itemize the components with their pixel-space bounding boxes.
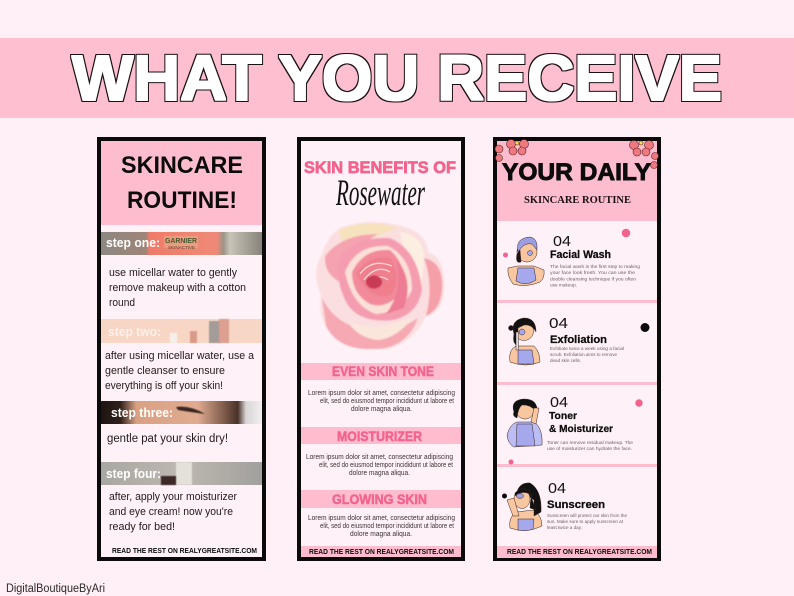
benefit: even skin tone: elit, sed do eiusmod tempor incididunt ut labore et (320, 398, 454, 405)
step: sunscreen: 04 (548, 480, 566, 497)
panel 3 footer: READ THE REST ON REALYGREATSITE.COM (507, 547, 652, 556)
benefit: moisturizer (301, 427, 461, 477)
benefit: even skin tone: EVEN SKIN TONE (332, 364, 434, 379)
panel 3 header: YOUR DAILY (502, 159, 651, 186)
step: exfoliation: Exfoliation (550, 334, 607, 346)
step: facial wash: double cleansing technique if you often (550, 276, 636, 282)
step: exfoliation: 04 (549, 315, 568, 332)
step: toner and moisturizer: Toner can remove residual makeup. The (547, 440, 633, 446)
step one banner: step one: (106, 236, 160, 250)
panel 3 header (495, 140, 658, 221)
illustration: rose (316, 222, 444, 349)
step: sunscreen: Sunscreen (547, 499, 605, 511)
title: WHAT YOU RECEIVE (72, 42, 722, 114)
step: facial wash: The facial wash is the first step to making (550, 264, 640, 270)
step three banner (101, 401, 262, 424)
step one text: remove makeup with a cotton (109, 282, 246, 294)
benefit: glowing skin: GLOWING SKIN (332, 492, 427, 507)
decorative dots (502, 229, 650, 498)
benefit: even skin tone (301, 363, 461, 413)
panel: daily skincare routine (495, 139, 659, 559)
benefit: glowing skin: elit, sed do eiusmod tempor incididunt ut labore et (320, 523, 454, 530)
benefit: even skin tone: Lorem ipsum dolor sit amet, consectetur adipiscing (308, 390, 455, 397)
benefit: glowing skin (301, 490, 461, 538)
step four banner: step four: (106, 467, 161, 481)
step: toner and moisturizer: 04 (550, 394, 568, 411)
step: facial wash: 04 (553, 233, 571, 250)
step two text: gentle cleanser to ensure (105, 365, 225, 377)
step: toner and moisturizer: use of moisturizer can hydrate the face. (547, 446, 632, 452)
icon: woman with cotton pad (507, 399, 542, 447)
icon: corner flowers (495, 140, 658, 168)
benefit: moisturizer: dolore magna aliqua. (349, 470, 410, 477)
panel 3 header: SKINCARE ROUTINE (524, 195, 631, 206)
step: facial wash: Facial Wash (550, 249, 611, 261)
step: sunscreen: Sunscreen will protect our skin from the (547, 513, 627, 519)
step three text: gentle pat your skin dry! (107, 433, 228, 445)
step: sunscreen (507, 480, 627, 531)
panel 1 header: SKINCARE (121, 152, 243, 179)
panel: rosewater benefits (299, 139, 463, 559)
step two text: everything is off your skin! (105, 380, 223, 392)
benefit: glowing skin: Lorem ipsum dolor sit amet, consectetur adipiscing (308, 515, 455, 522)
step: toner and moisturizer: & Moisturizer (549, 423, 613, 435)
script heading: Rosewater (335, 173, 425, 214)
shop credit: DigitalBoutiqueByAri (6, 583, 105, 595)
step: sunscreen: least twice a day. (547, 525, 582, 531)
step: exfoliation (508, 315, 624, 365)
benefit: moisturizer: elit, sed do eiusmod tempor incididunt ut labore et (319, 462, 453, 469)
step four text: and eye cream! now you're (109, 506, 233, 518)
step: exfoliation: scrub. Exfoliation aims to remove (550, 352, 617, 358)
step two text (105, 350, 255, 392)
benefit: moisturizer: MOISTURIZER (337, 429, 422, 444)
step four text: ready for bed! (109, 521, 175, 533)
icon: woman applying sunscreen (507, 483, 542, 531)
panel 1 header (101, 141, 262, 225)
step three banner: step three: (111, 406, 173, 420)
step: facial wash: your face look fresh. You can use the (550, 270, 635, 276)
step: facial wash (508, 233, 640, 288)
panel: skincare routine (99, 139, 264, 559)
step one banner (101, 232, 262, 255)
step: facial wash: use makeup. (550, 282, 577, 288)
title banner (0, 38, 794, 118)
step one text (109, 267, 246, 309)
panel 1 header: ROUTINE! (127, 187, 237, 214)
dividers (497, 300, 657, 467)
panel 3 footer (497, 546, 657, 558)
panel 1 footer: READ THE REST ON REALYGREATSITE.COM (112, 546, 257, 555)
step four text: after, apply your moisturizer (109, 491, 237, 503)
step: toner and moisturizer (507, 394, 633, 452)
benefit: glowing skin: dolore magna aliqua. (350, 531, 412, 538)
benefit: moisturizer: Lorem ipsum dolor sit amet, consectetur adipiscing (306, 454, 453, 461)
step two banner: step two: (108, 325, 161, 339)
icon: woman with headband (508, 237, 544, 286)
benefit: even skin tone: dolore magna aliqua. (351, 406, 412, 413)
panel 2 heading: SKIN BENEFITS OF (304, 158, 456, 177)
step one banner: SKINACTIVE (168, 245, 195, 250)
step one text: use micellar water to gently (109, 267, 237, 279)
step two text: after using micellar water, use a (105, 350, 255, 362)
step four banner (101, 462, 262, 485)
panel 2 footer: READ THE REST ON REALYGREATSITE.COM (309, 547, 454, 556)
step: exfoliation: Exfoliate twice a week using a facial (550, 346, 624, 352)
icon: woman with face roller (508, 318, 540, 365)
step: sunscreen: sun. Make sure to apply sunscreen at (547, 519, 624, 525)
step two banner (101, 319, 262, 343)
step one banner: GARNIER (165, 236, 198, 245)
step: toner and moisturizer: Toner (549, 410, 577, 422)
step: exfoliation: dead skin cells. (550, 358, 581, 364)
step one text: round (109, 297, 135, 309)
step four text (109, 491, 237, 533)
